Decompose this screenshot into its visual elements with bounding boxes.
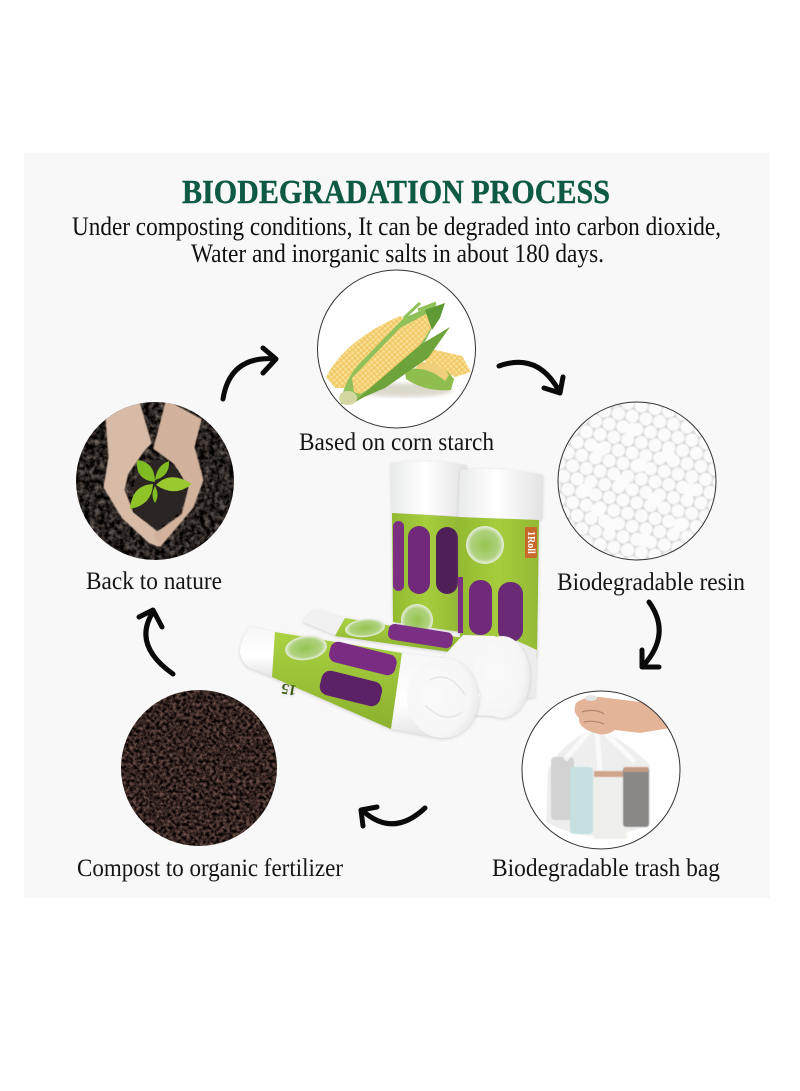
lying roll: front: 15 [280,679,298,698]
step: compost [77,689,344,882]
upright roll: front [458,469,543,698]
arrow: trash bag to compost [361,807,425,826]
label: corn: Based on corn starch [299,429,494,456]
title: BIODEGRADATION PROCESS [182,174,610,211]
label: compost: Compost to organic fertilizer [77,855,344,882]
subtitle: Under composting conditions, It can be degraded into carbon dioxide, [72,212,721,241]
label: resin: Biodegradable resin [557,569,745,596]
icon: compost soil photo [120,689,278,847]
icon: trash bag photo [522,691,680,849]
upright roll: back [391,461,467,636]
panel: background [24,153,770,898]
step: corn [299,270,494,456]
arrow: resin to trash bag [642,602,659,667]
arrow: compost to nature [139,610,173,674]
subtitle [72,212,721,268]
label: roll count: 1Roll [525,531,536,554]
lying roll: back [303,610,530,718]
subtitle: Water and inorganic salts in about 180 days. [191,239,604,268]
label: roll count [525,527,537,558]
step: trash bag [492,691,720,882]
icon: corn photo [318,270,476,428]
lying roll: front [240,627,480,738]
label: trash bag: Biodegradable trash bag [492,855,720,882]
icon: resin pellets photo [557,401,717,561]
infographic [72,180,745,882]
label: back to nature: Back to nature [86,568,222,595]
step: resin [557,401,745,596]
product: garbage bag rolls [240,461,543,738]
arrow: nature to corn [223,348,276,399]
step: back to nature [75,401,235,595]
icon: hands holding seedling photo [75,401,235,561]
arrow: corn to resin [499,362,563,393]
